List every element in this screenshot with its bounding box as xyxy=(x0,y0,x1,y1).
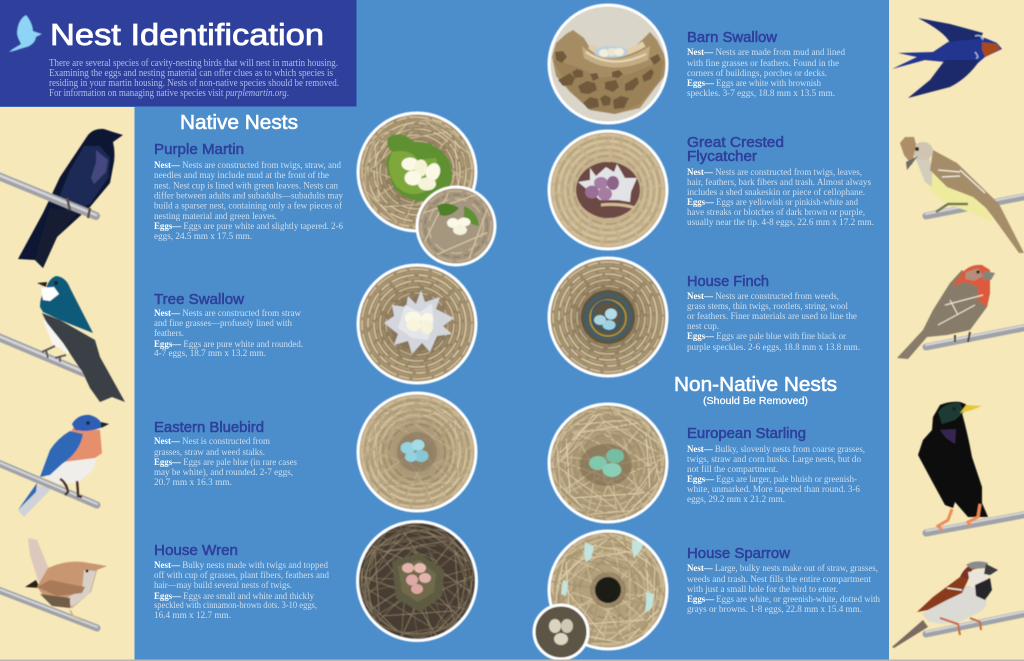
text block: Tree Swallow: 4-7 eggs, 18.7 mm x 13.2 mm. xyxy=(154,348,266,359)
panel: title header xyxy=(0,0,356,106)
bird: House Wren xyxy=(0,538,107,628)
text block: House Finch: nest cup. xyxy=(687,321,719,332)
nest: European Starling xyxy=(529,384,687,542)
text block: Eastern Bluebird: may be white), and rounded. 2-7 eggs, xyxy=(154,467,293,478)
text block: House Wren: Eggs— Eggs are small and white and thickly xyxy=(154,591,314,602)
perch xyxy=(0,588,97,628)
text block: Purple Martin: eggs, 24.5 mm x 17.5 mm. xyxy=(154,231,252,242)
nest: Great Crested Flycatcher xyxy=(549,131,667,249)
text block: House Sparrow: House Sparrow xyxy=(687,546,791,562)
text block: Barn Swallow: speckles. 3-7 eggs, 18.8 mm x 13.5 mm. xyxy=(687,88,835,99)
text block: House Finch: purple speckles. 2-6 eggs, 18.8 mm x 13.8 mm. xyxy=(687,342,860,353)
text block: Purple Martin: differ between adults and subadults—subadults may xyxy=(154,190,343,202)
text block: Purple Martin: Nest— Nests are constructed from twigs, straw, and xyxy=(154,160,341,171)
text block: House Sparrow xyxy=(687,546,880,615)
text block: House Finch: grass stems, thin twigs, rootlets, string, wool xyxy=(687,301,848,312)
text block: House Wren: House Wren xyxy=(154,543,238,559)
nest: House Finch xyxy=(549,258,667,376)
text block: Tree Swallow: and fine grasses—profusely lined with xyxy=(154,318,292,329)
perch xyxy=(0,335,84,373)
text block: Purple Martin: needles and may include mud at the front of the xyxy=(154,170,329,181)
text block: Barn Swallow: corners of buildings, porches or decks. xyxy=(687,68,827,79)
text block: Barn Swallow xyxy=(687,30,845,99)
text block: Barn Swallow: Barn Swallow xyxy=(687,30,778,46)
text block: Tree Swallow xyxy=(154,292,303,359)
text block: House Finch: Nest— Nests are constructed from weeds, xyxy=(687,291,839,302)
intro text: residing in your martin housing. Nests of non-native species should be removed. xyxy=(49,78,339,89)
icon: flying bird xyxy=(9,15,42,52)
text block: House Finch: Eggs— Eggs are pale blue with fine black or xyxy=(687,331,847,342)
text block: Eastern Bluebird: Eastern Bluebird xyxy=(154,420,264,436)
panel: left bird strip xyxy=(0,107,134,661)
text block: Tree Swallow: Nest— Nests are constructed from straw xyxy=(154,308,301,319)
perch xyxy=(926,194,1024,216)
text block: Tree Swallow: feathers. xyxy=(154,328,184,339)
text block: Purple Martin: build a sparser nest, containing only a few pieces of xyxy=(154,201,343,212)
text block: Purple Martin: Purple Martin xyxy=(154,142,244,158)
text block: House Wren: off with cup of grasses, plant fibers, feathers and xyxy=(154,570,329,581)
bird: Great Crested Flycatcher xyxy=(900,137,1024,253)
nest: House Sparrow xyxy=(530,512,686,661)
text block: House Finch xyxy=(687,274,860,353)
bird: European Starling xyxy=(918,402,1024,533)
text block: European Starling: Nest— Bulky, slovenly nests from coarse grasses, xyxy=(687,444,865,455)
heading: Native Nests: Native Nests xyxy=(180,111,298,134)
text block: Great Crested Flycatcher: have streaks or blotches of dark brown or purple, xyxy=(687,207,865,218)
text block: European Starling xyxy=(687,426,865,505)
perch xyxy=(0,174,96,216)
text block: Great Crested Flycatcher xyxy=(687,135,874,228)
text block: Great Crested Flycatcher: includes a shed snakeskin or piece of cellophane. xyxy=(687,187,865,198)
heading: Non-Native Nests xyxy=(674,373,837,407)
nest: Purple Martin xyxy=(358,113,476,231)
nest inset: House Sparrow eggs xyxy=(534,605,588,659)
text block: Great Crested Flycatcher: Nest— Nests are constructed from twigs, leaves, xyxy=(687,167,862,178)
bird: Tree Swallow xyxy=(0,276,125,402)
text block: House Sparrow: grays or browns. 1-8 eggs, 22.8 mm x 15.4 mm. xyxy=(687,604,862,615)
text block: House Wren: Nest— Bulky nests made with twigs and topped xyxy=(154,560,328,571)
bird: House Sparrow xyxy=(892,561,1024,648)
text block: Purple Martin: Eggs— Eggs are pure white and slightly tapered. 2-6 xyxy=(154,221,343,232)
nest inset: sparse Purple Martin nest xyxy=(417,187,495,265)
nest: Eastern Bluebird xyxy=(358,393,476,511)
text block: House Wren: speckled with cinnamon-brown dots. 3-10 eggs, xyxy=(154,600,317,611)
bird: Barn Swallow xyxy=(892,18,1002,98)
text block: Eastern Bluebird: 20.7 mm x 16.3 mm. xyxy=(154,477,232,488)
text block: Tree Swallow: Eggs— Eggs are pure white and rounded. xyxy=(154,339,303,350)
text block: European Starling: eggs, 29.2 mm x 21.2 mm. xyxy=(687,494,785,505)
intro text xyxy=(49,58,339,99)
perch xyxy=(926,611,1024,634)
intro text: There are several species of cavity-nesting birds that will nest in martin housing. xyxy=(49,58,338,69)
perch xyxy=(926,512,1024,533)
text block: Great Crested Flycatcher: Flycatcher xyxy=(687,149,757,165)
text block: European Starling: twigs, straw and corn husks. Large nests, but do xyxy=(687,454,861,465)
text block: Barn Swallow: Nest— Nests are made from mud and lined xyxy=(687,47,845,58)
bird: Purple Martin xyxy=(0,129,123,268)
text block: House Wren: hair—may build several nests of twigs. xyxy=(154,580,292,591)
page bottom edge xyxy=(0,660,1024,661)
text block: Purple Martin xyxy=(154,142,343,242)
text block: European Starling: white, unmarked. More tapered than round. 3-6 xyxy=(687,484,860,495)
text block: House Finch: House Finch xyxy=(687,274,769,290)
text block: House Sparrow: Nest— Large, bulky nests make out of straw, grasses, xyxy=(687,563,878,574)
title: Nest Identification xyxy=(50,17,324,52)
perch xyxy=(0,461,97,505)
text block: House Wren: 16.4 mm x 12.7 mm. xyxy=(154,610,231,621)
text block: Purple Martin: nest. Nest cup is lined with green leaves. Nests can xyxy=(154,180,338,192)
text block: European Starling: European Starling xyxy=(687,426,806,442)
bird: Eastern Bluebird xyxy=(0,415,109,517)
text block: Eastern Bluebird: Eggs— Eggs are pale blue (in rare cases xyxy=(154,457,297,468)
text block: House Finch: or feathers. Finer materials are used to line the xyxy=(687,311,857,322)
text block: European Starling: Eggs— Eggs are larger, pale bluish or greenish- xyxy=(687,474,857,485)
perch xyxy=(926,325,1024,347)
nest: Barn Swallow xyxy=(549,5,668,123)
text block: Eastern Bluebird xyxy=(154,420,297,488)
text block: Purple Martin: nesting material and green leaves. xyxy=(154,211,277,222)
text block: Eastern Bluebird: Nest— Nest is constructed from xyxy=(154,436,270,447)
text block: Eastern Bluebird: grasses, straw and weed stalks. xyxy=(154,447,265,458)
intro text: For information on managing native species visit purplemartin.org. xyxy=(49,88,289,99)
text block: Great Crested Flycatcher: hair, feathers, bark fibers and trash. Almost always xyxy=(687,177,871,188)
text block: Great Crested Flycatcher: Eggs— Eggs are yellowish or pinkish-white and xyxy=(687,197,858,208)
nest: House Wren xyxy=(339,503,495,659)
heading: Non-Native Nests: Non-Native Nests xyxy=(674,373,837,396)
nest: Tree Swallow xyxy=(358,265,476,383)
text block: Great Crested Flycatcher: Great Crested xyxy=(687,135,784,151)
text block: European Starling: not fill the compartment. xyxy=(687,464,778,475)
text block: House Wren xyxy=(154,543,329,621)
text block: House Sparrow: with just a small hole for the bird to enter. xyxy=(687,584,838,595)
text block: Barn Swallow: with fine grasses or feathers. Found in the xyxy=(687,58,839,69)
heading: Non-Native Nests: (Should Be Removed) xyxy=(703,395,808,407)
bird: House Finch xyxy=(897,265,1024,359)
text block: Barn Swallow: Eggs— Eggs are white with brownish xyxy=(687,78,821,89)
text block: Tree Swallow: Tree Swallow xyxy=(154,292,245,308)
intro text: Examining the eggs and nesting material can offer clues as to which species is xyxy=(49,68,333,79)
text block: Great Crested Flycatcher: usually near the tip. 4-8 eggs, 22.6 mm x 17.2 mm. xyxy=(687,217,874,228)
panel: right bird strip xyxy=(889,0,1024,661)
text block: House Sparrow: Eggs— Eggs are white, or greenish-white, dotted with xyxy=(687,594,880,605)
text block: House Sparrow: weeds and trash. Nest fills the entire compartment xyxy=(687,574,871,585)
